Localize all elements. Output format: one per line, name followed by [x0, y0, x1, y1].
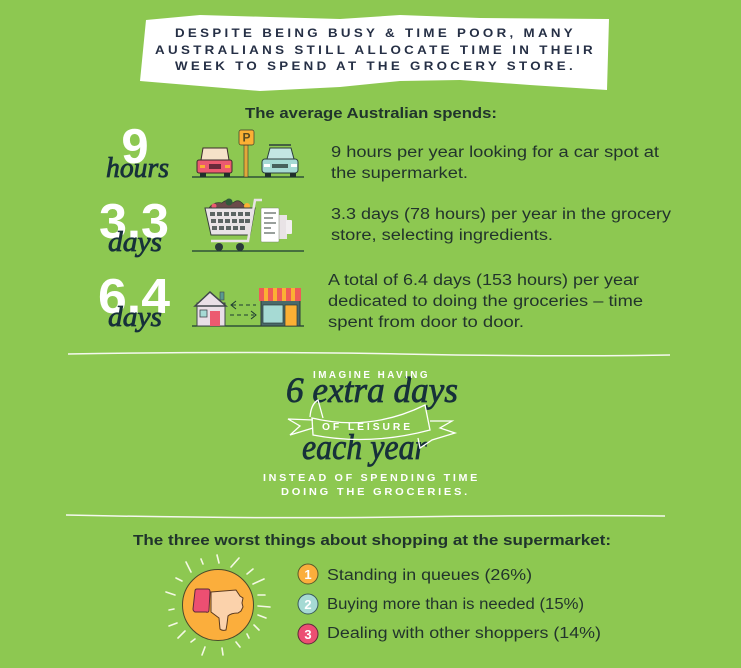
item 1 [298, 564, 532, 584]
callout: six extra days of leisure: DOING THE GROCERIES. [281, 487, 470, 498]
text: 6.4 days description: dedicated to doing the groceries – time [328, 293, 643, 310]
ribbon [288, 400, 455, 448]
list: three worst things [298, 564, 601, 644]
text: 6.4 days description [328, 272, 643, 331]
receipt [279, 215, 287, 239]
text: 9 hours description: the supermarket. [331, 165, 468, 182]
icon: house to store [192, 288, 304, 326]
text: 3.3 days description: store, selecting ingredients. [331, 227, 553, 244]
stat: 9 hours [106, 120, 169, 184]
dashed arrows [230, 301, 256, 319]
heading: the average Australian spends: The average Australian spends: [245, 105, 497, 122]
callout: six extra days of leisure: OF LEISURE [322, 421, 413, 433]
house [195, 292, 226, 326]
item 2: 2 [304, 597, 312, 612]
item 3 [298, 624, 601, 644]
icon: two cars and parking sign [192, 130, 304, 177]
callout: six extra days of leisure: each year [302, 427, 428, 467]
icon: two cars and parking sign: P [242, 130, 251, 144]
item 3: 3 [304, 627, 312, 642]
text: 3.3 days description: 3.3 days (78 hours) per year in the grocery [331, 206, 671, 223]
callout: six extra days of leisure: 6 extra days [286, 370, 458, 410]
icon: thumbs down with rays [166, 555, 270, 655]
store [259, 288, 301, 326]
icon: blue car [262, 145, 298, 177]
text: 6.4 days description: spent from door to door. [328, 314, 524, 331]
banner: intro statement: DESPITE BEING BUSY & TIME POOR, MANY [175, 26, 576, 40]
banner: intro statement [140, 15, 609, 91]
stat: 9 hours: 9 [121, 120, 149, 174]
icon: shopping cart and receipt [192, 198, 304, 251]
stat: 6.4 days: 6.4 [98, 270, 170, 324]
stat: 6.4 days: days [108, 301, 162, 333]
banner: intro statement: WEEK TO SPEND AT THE GROCERY STORE. [175, 59, 576, 73]
stat: 3.3 days: days [108, 226, 162, 258]
text: 3.3 days description [331, 206, 671, 244]
callout: six extra days of leisure [263, 370, 480, 498]
heading: three worst things: The three worst things about shopping at the supermarket: [133, 532, 611, 549]
item 1: Standing in queues (26%) [327, 567, 532, 584]
stat: 9 hours: hours [106, 152, 169, 184]
item 1: 1 [304, 567, 312, 582]
text: 6.4 days description: A total of 6.4 days (153 hours) per year [328, 272, 639, 289]
item 2: Buying more than is needed (15%) [327, 596, 584, 613]
stat: 3.3 days: 3.3 [99, 195, 169, 249]
groceries [209, 198, 250, 209]
callout: six extra days of leisure: INSTEAD OF SPENDING TIME [263, 473, 480, 484]
item 3: Dealing with other shoppers (14%) [327, 625, 601, 642]
banner: intro statement: AUSTRALIANS STILL ALLOCATE TIME IN THEIR [155, 43, 596, 57]
text: 9 hours description: 9 hours per year looking for a car spot at [331, 144, 660, 161]
text: 9 hours description [331, 144, 660, 182]
icon: red car [197, 148, 232, 177]
callout: six extra days of leisure: IMAGINE HAVING [313, 370, 430, 381]
